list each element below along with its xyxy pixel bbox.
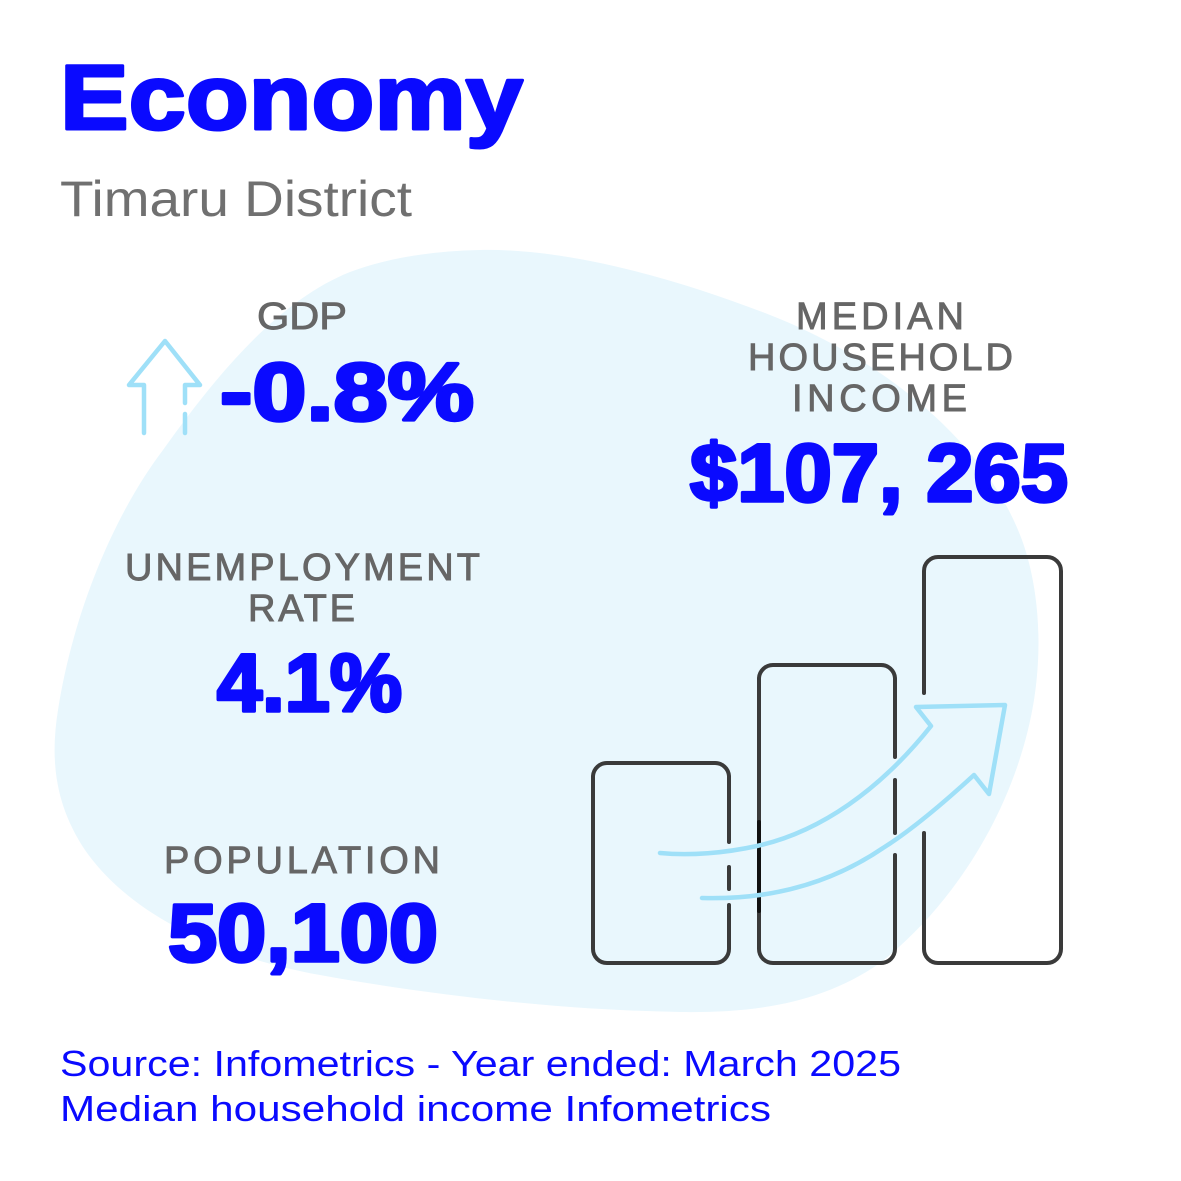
GDP value: -0.8% xyxy=(220,347,474,438)
growth arrow xyxy=(660,705,1005,898)
unemployment label: UNEMPLOYMENT xyxy=(125,547,480,589)
unemployment value: 4.1% xyxy=(217,638,402,729)
icon: up arrow xyxy=(129,341,200,433)
population label: POPULATION xyxy=(164,840,440,882)
income label: HOUSEHOLD xyxy=(748,337,1013,379)
source note xyxy=(60,1043,901,1129)
bar 2 xyxy=(759,665,895,963)
title: Economy xyxy=(60,47,523,149)
chart illustration: rising bars with arrow xyxy=(593,557,1061,963)
population value: 50,100 xyxy=(168,888,438,979)
stat: GDP xyxy=(129,296,474,438)
bar 3 xyxy=(924,557,1061,963)
income label xyxy=(748,296,1013,420)
income label: MEDIAN xyxy=(796,296,964,338)
background blob xyxy=(55,250,1038,1012)
stat: unemployment rate xyxy=(125,547,480,729)
bar 1 xyxy=(593,763,729,963)
GDP label: GDP xyxy=(257,296,347,338)
unemployment label: RATE xyxy=(248,588,355,630)
income value: $107, 265 xyxy=(690,428,1068,519)
source note: Median household income Infometrics xyxy=(60,1088,771,1129)
subtitle: Timaru District xyxy=(60,171,412,227)
income label: INCOME xyxy=(792,378,967,420)
stat: population xyxy=(164,840,440,979)
stat: median household income xyxy=(690,296,1068,519)
source note: Source: Infometrics - Year ended: March 2025 xyxy=(60,1043,901,1084)
unemployment label xyxy=(125,547,480,630)
bar 2 overlap segment xyxy=(757,822,761,911)
